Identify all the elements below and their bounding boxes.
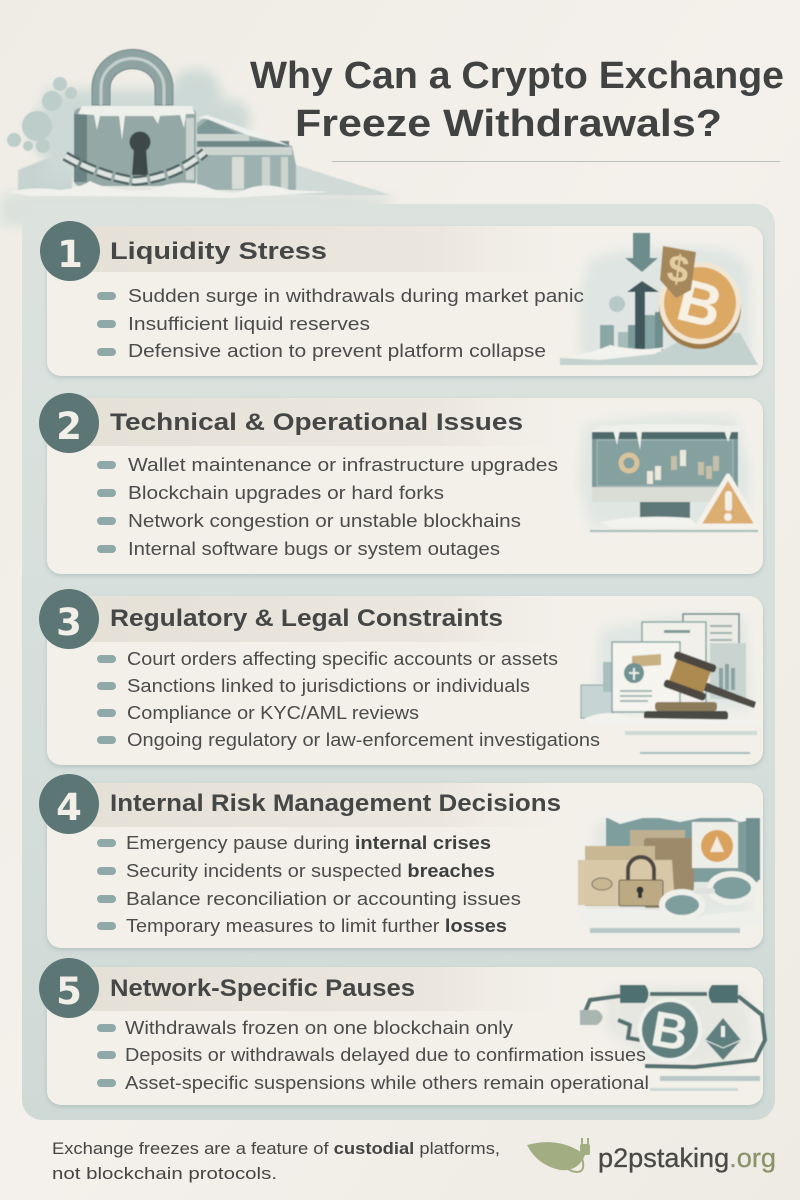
bullet list: Court orders affecting specific accounts or assets [127, 649, 558, 669]
icon: broken chain around bitcoin and ether [580, 985, 765, 1091]
bullet list [97, 833, 521, 936]
bullet list: Emergency pause during internal crises [126, 833, 491, 853]
icon: coin, arrows and skyline [560, 233, 758, 365]
logo: p2pstaking.org: p2pstaking.org [598, 1143, 776, 1173]
icon: frozen monitor with warning triangle [578, 415, 758, 532]
bullet list: Ongoing regulatory or law-enforcement investigations [127, 730, 600, 750]
heading: Liquidity Stress [110, 238, 327, 265]
panel: card 1 liquidity stress [40, 221, 763, 376]
bullet list [97, 455, 558, 559]
snow drifts [10, 181, 330, 198]
bullet list: Sudden surge in withdrawals during market panic [128, 286, 584, 306]
bullet list [97, 1018, 649, 1093]
heading: Technical & Operational Issues [110, 409, 523, 436]
bullet list: Security incidents or suspected breaches [126, 861, 495, 881]
bullet list: Defensive action to prevent platform collapse [128, 341, 546, 361]
header illustration: frozen padlock and exchange building [0, 50, 400, 226]
bullet list: Insufficient liquid reserves [128, 314, 370, 334]
number badge 4 [39, 774, 99, 834]
footer note: Exchange freezes are a feature of custodial platforms, [52, 1139, 500, 1158]
title [250, 55, 784, 145]
bullet list: Asset-specific suspensions while others remain operational [125, 1073, 649, 1093]
bullet list: Blockchain upgrades or hard forks [128, 483, 444, 503]
bullet list: Withdrawals frozen on one blockchain only [125, 1018, 513, 1038]
icon: coin, arrows and skyline: B [671, 266, 729, 341]
icon: coin, arrows and skyline: $ [665, 248, 691, 292]
bullet list: Wallet maintenance or infrastructure upgrades [128, 455, 558, 475]
chain [65, 152, 205, 181]
icon: broken chain around bitcoin and ether: B [647, 1000, 692, 1062]
bullet list: Internal software bugs or system outages [128, 539, 500, 559]
title: Why Can a Crypto Exchange [250, 55, 784, 97]
panel: card 5 network-specific pauses [39, 958, 765, 1105]
icon: documents and gavel [581, 614, 762, 754]
number badge 1 [40, 221, 100, 281]
bullet list [97, 649, 600, 750]
bullet list: Balance reconciliation or accounting issues [126, 889, 521, 909]
panel: card 2 technical and operational issues [39, 393, 763, 574]
icon: leaf and plug [527, 1138, 590, 1172]
footer note: not blockchain protocols. [52, 1164, 277, 1183]
building [197, 115, 296, 190]
logo: p2pstaking.org [527, 1138, 776, 1173]
number badge 5 [39, 958, 99, 1018]
number badge 5: 5 [56, 970, 82, 1013]
heading: Regulatory & Legal Constraints [110, 605, 503, 632]
bullet list: Compliance or KYC/AML reviews [127, 703, 419, 723]
panel: card 3 regulatory and legal constraints [39, 589, 763, 765]
bullet list: Temporary measures to limit further losses [126, 916, 507, 936]
number badge 2 [39, 393, 99, 453]
number badge 3: 3 [56, 601, 82, 644]
icon: folders, padlock and broken handcuffs [578, 809, 762, 933]
bullet list [97, 286, 584, 361]
number badge 3 [39, 589, 99, 649]
bullet list: Deposits or withdrawals delayed due to confirmation issues [125, 1045, 646, 1065]
padlock [74, 50, 196, 186]
footer note [52, 1139, 500, 1183]
bullet list: Sanctions linked to jurisdictions or individuals [127, 676, 530, 696]
number badge 1: 1 [57, 233, 83, 276]
heading: Internal Risk Management Decisions [110, 790, 561, 817]
number badge 4: 4 [56, 786, 82, 829]
number badge 2: 2 [56, 405, 82, 448]
title: Freeze Withdrawals? [295, 103, 722, 145]
panel: card 4 internal risk management decisions [39, 774, 763, 948]
heading: Network-Specific Pauses [110, 975, 415, 1002]
panel: outer frame [22, 204, 775, 1120]
bullet list: Network congestion or unstable blockhains [128, 511, 521, 531]
